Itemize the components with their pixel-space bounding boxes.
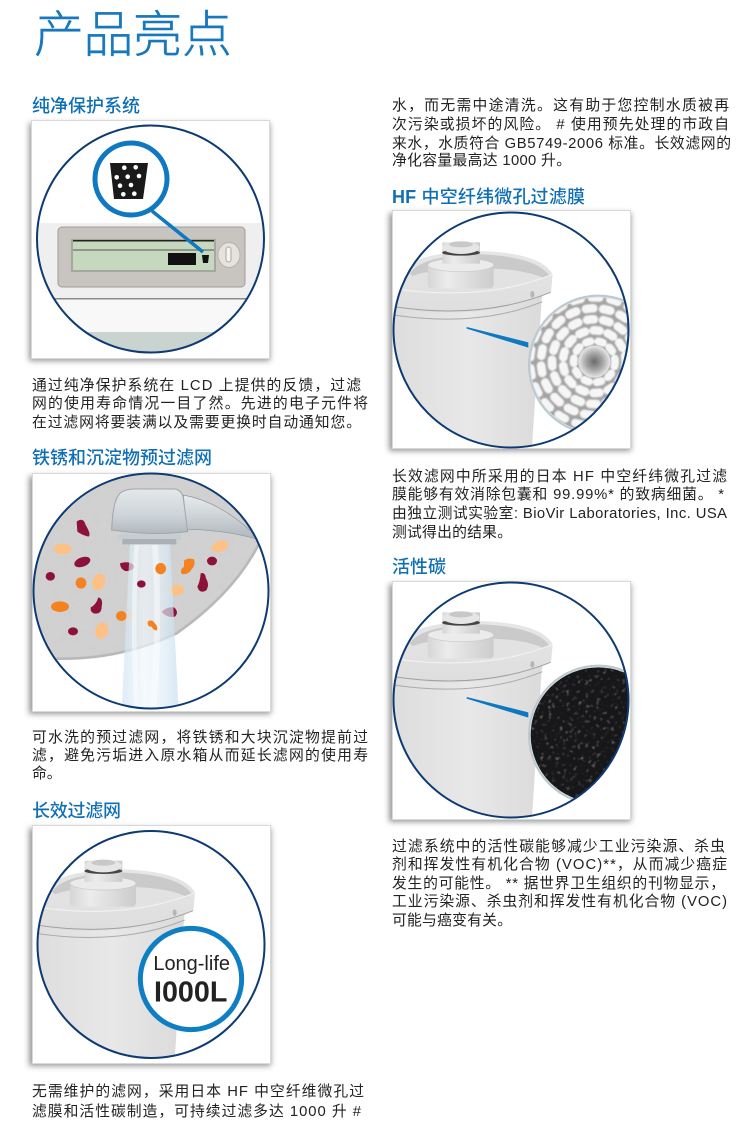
heading: purity protection system: 纯净保护系统 bbox=[32, 96, 140, 116]
icon: tap bbox=[112, 489, 260, 544]
heading: activated carbon: 活性碳 bbox=[392, 557, 446, 577]
text: activated carbon description bbox=[392, 838, 727, 929]
text: long-life filter description: 滤膜和活性碳制造，可持续过滤多达 1000 升 # bbox=[32, 1103, 362, 1120]
panel: LCD purity display bbox=[29, 120, 270, 362]
sediment particles behind water bbox=[46, 520, 230, 640]
panel: long-life filter bbox=[29, 826, 271, 1070]
text: activated carbon description: 工业污染源、杀虫剂和挥发性有机化合物 (VOC) bbox=[392, 893, 727, 910]
text: long-life filter description bbox=[32, 1083, 364, 1120]
text: pre-filter description: 命。 bbox=[32, 764, 62, 782]
text: HF membrane description: 测试得出的结果。 bbox=[392, 524, 512, 541]
panel: activated carbon bbox=[389, 582, 672, 822]
text: activated carbon description: 过滤系统中的活性碳能够减少工业污染源、杀虫 bbox=[392, 838, 725, 855]
text: long-life filter description continued bbox=[392, 97, 731, 169]
text: purity protection description bbox=[32, 377, 368, 431]
icon: magnified filter indicator bbox=[95, 143, 203, 252]
outer circle bbox=[394, 582, 628, 818]
heading: long-life filter: 长效过滤网 bbox=[32, 801, 121, 821]
text: long-life filter description: 无需维护的滤网，采用日本 HF 中空纤维微孔过 bbox=[32, 1083, 364, 1100]
badge: long-life 1000L: Long-life bbox=[153, 953, 230, 975]
text: HF membrane description: 膜能够有效消除包囊和 99.99%* 的致病细菌。 * bbox=[392, 486, 724, 503]
outer circle bbox=[38, 831, 264, 1058]
magnified membrane cross-section bbox=[528, 294, 628, 430]
grey sediment filter surface bbox=[34, 474, 259, 660]
LCD housing bbox=[58, 227, 245, 287]
text: long-life filter description continued: 净化容量最高达 1000 升。 bbox=[392, 152, 571, 169]
text: pre-filter description: 可水洗的预过滤网，将铁锈和大块沉淀物提前过 bbox=[32, 729, 368, 746]
text: long-life filter description continued: 次污染或损坏的风险。 # 使用预先处理的市政自 bbox=[392, 116, 729, 133]
text: purity protection description: 通过纯净保护系统在 LCD 上提供的反馈，过滤 bbox=[32, 377, 361, 394]
panel: pre-filter with tap bbox=[27, 470, 273, 714]
magnified carbon granules bbox=[528, 664, 628, 800]
text: activated carbon description: 剂和挥发性有机化合物 (VOC)**，从而减少癌症 bbox=[392, 856, 727, 873]
heading: rust and sediment pre-filter: 铁锈和沉淀物预过滤网 bbox=[32, 448, 212, 468]
heading: HF hollow fibre membrane: HF 中空纤纬微孔过滤膜 bbox=[392, 187, 585, 207]
text: activated carbon description: 发生的可能性。 ** 据世界卫生组织的刊物显示， bbox=[392, 875, 725, 892]
text: purity protection description: 在过滤网将要装满以及需要更换时自动通知您。 bbox=[32, 414, 361, 431]
text: pre-filter description bbox=[32, 729, 368, 782]
title: 产品亮点 bbox=[34, 7, 232, 63]
text: long-life filter description continued: 来水，水质符合 GB5749-2006 标准。长效滤网的 bbox=[392, 135, 731, 152]
badge: long-life 1000L: I000L bbox=[154, 977, 227, 1009]
water stream bbox=[122, 543, 179, 710]
text: HF membrane description bbox=[392, 468, 727, 541]
outer circle bbox=[394, 212, 628, 448]
sediment particles on water bbox=[137, 563, 166, 631]
text: long-life filter description continued: 水，而无需中途清洗。这有助于您控制水质被再 bbox=[392, 97, 729, 114]
text: purity protection description: 网的使用寿命情况一目了然。先进的电子元件将 bbox=[32, 394, 368, 412]
text: activated carbon description: 可能与癌变有关。 bbox=[392, 912, 512, 929]
outer circle bbox=[37, 126, 264, 352]
text: HF membrane description: 长效滤网中所采用的日本 HF 中空纤纬微孔过滤 bbox=[392, 468, 727, 485]
badge: long-life 1000L bbox=[140, 928, 242, 1030]
text: pre-filter description: 滤，避免污垢进入原水箱从而延长滤网的使用寿 bbox=[32, 747, 368, 764]
panel: HF hollow fibre membrane bbox=[389, 210, 672, 452]
outer circle bbox=[34, 474, 268, 708]
text: HF membrane description: 由独立测试实验室: BioVir Laboratories, Inc. USA bbox=[392, 505, 727, 522]
